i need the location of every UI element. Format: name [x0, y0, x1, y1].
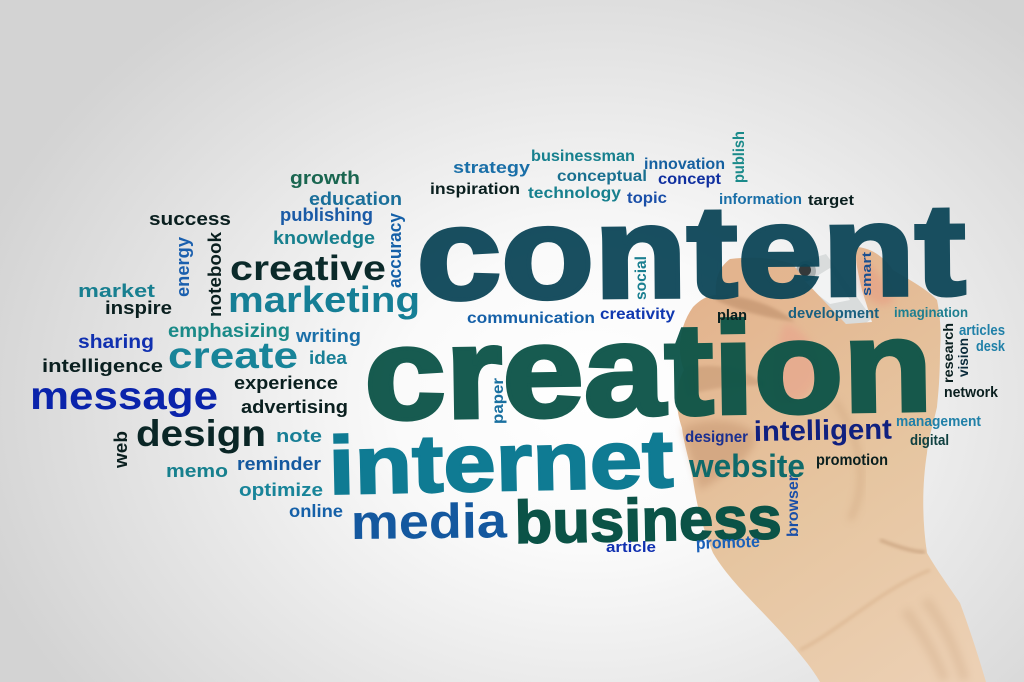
word: smart: smart [859, 251, 874, 296]
word: creative: creative [230, 249, 386, 288]
word: create: create [168, 335, 298, 376]
word: website: website [688, 448, 805, 484]
word: article: article [606, 540, 656, 556]
word: publish: publish [731, 131, 748, 183]
word: creativity: creativity [600, 306, 675, 323]
word: conceptual: conceptual [557, 168, 647, 185]
word: success: success [149, 208, 231, 229]
word: message: message [30, 375, 218, 418]
word: designer: designer [685, 429, 748, 446]
icon: hand holding marker [677, 247, 986, 682]
word: accuracy: accuracy [384, 212, 405, 288]
word: notebook: notebook [204, 231, 225, 317]
word: optimize: optimize [239, 479, 323, 500]
word: browser: browser [785, 475, 802, 537]
word: publishing: publishing [280, 204, 373, 225]
word: articles: articles [959, 322, 1005, 339]
word: digital: digital [910, 432, 949, 449]
word: knowledge: knowledge [273, 227, 375, 248]
word: note: note [276, 425, 322, 446]
word: content: content [416, 176, 966, 327]
finger shading [682, 255, 965, 680]
word: communication: communication [467, 310, 595, 327]
word: intelligence: intelligence [42, 355, 163, 376]
marker pen [796, 254, 872, 326]
word: education: education [309, 188, 402, 209]
word: businessman: businessman [531, 148, 635, 165]
word: energy: energy [172, 236, 193, 297]
word: plan: plan [717, 307, 747, 324]
word: media: media [351, 494, 508, 550]
word: online: online [289, 501, 343, 521]
word: technology: technology [528, 185, 621, 202]
word: experience: experience [234, 372, 338, 393]
word: reminder: reminder [237, 453, 321, 474]
word: management: management [896, 413, 981, 430]
word: marketing: marketing [228, 279, 420, 320]
word: idea: idea [309, 347, 348, 368]
word: paper: paper [490, 378, 507, 424]
word: creation: creation [363, 292, 933, 447]
word: network: network [944, 384, 999, 401]
word: writing: writing [295, 325, 361, 346]
word: promote: promote [696, 533, 760, 553]
word: information: information [719, 191, 802, 208]
word: topic: topic [627, 190, 667, 207]
word: inspiration: inspiration [430, 181, 520, 198]
word: market: market [78, 280, 155, 301]
word: promotion: promotion [816, 452, 888, 469]
word cloud [30, 131, 1006, 556]
word: sharing: sharing [78, 331, 154, 353]
word: emphasizing: emphasizing [168, 320, 290, 342]
word: research: research [940, 323, 956, 383]
word: design: design [136, 413, 266, 454]
word: advertising: advertising [241, 396, 348, 417]
word: imagination: imagination [894, 304, 968, 320]
hand silhouette [677, 247, 986, 682]
word: memo: memo [166, 460, 228, 481]
word: vision: vision [955, 338, 971, 377]
word: development: development [788, 306, 879, 322]
word: growth: growth [290, 167, 360, 188]
word: web: web [110, 431, 131, 469]
word: social: social [633, 256, 650, 300]
word: target: target [808, 193, 854, 209]
word: desk: desk [976, 338, 1006, 355]
word: innovation: innovation [644, 156, 725, 173]
word: inspire: inspire [105, 297, 172, 318]
word: strategy: strategy [453, 159, 531, 177]
word: internet: internet [327, 414, 674, 512]
word: business: business [514, 484, 782, 556]
word: intelligent: intelligent [754, 414, 893, 448]
word: concept: concept [658, 171, 721, 188]
